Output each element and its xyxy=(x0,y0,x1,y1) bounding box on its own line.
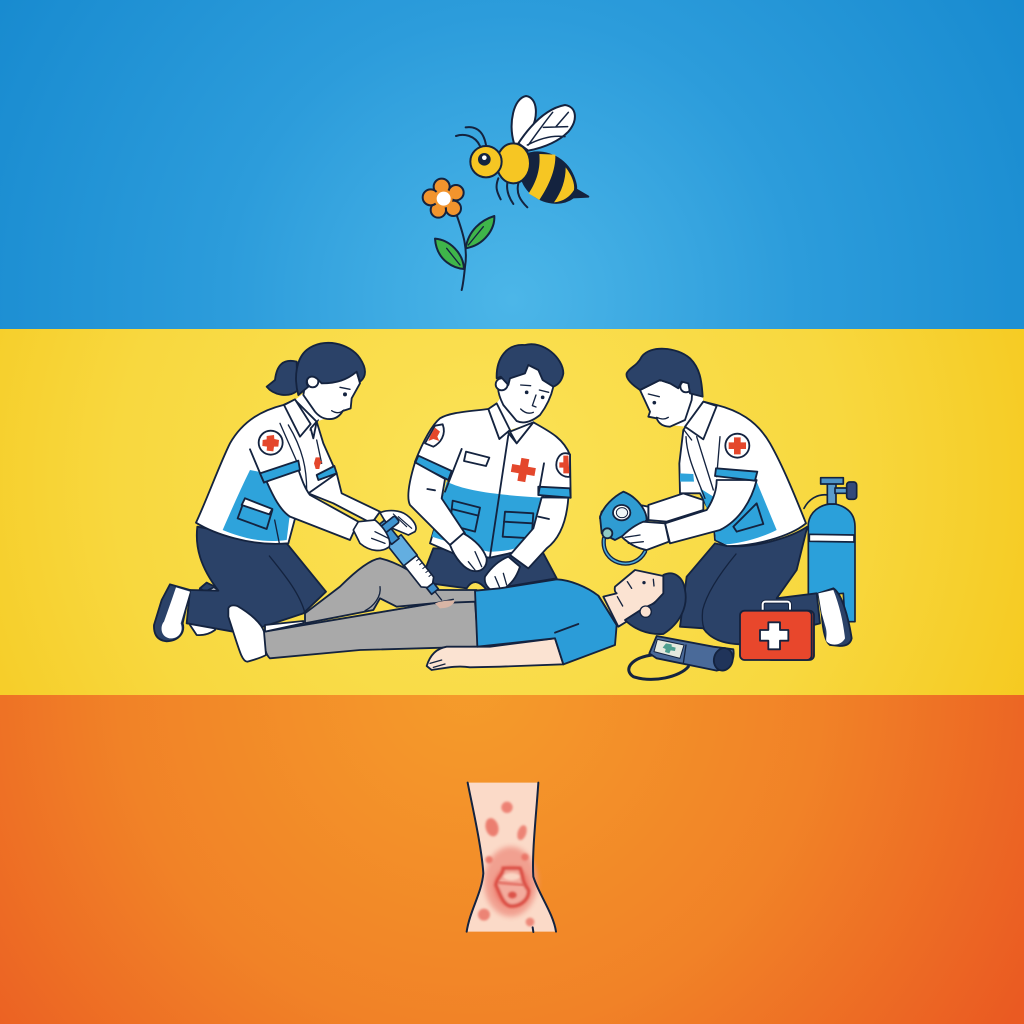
patch left xyxy=(425,424,444,447)
trousers xyxy=(425,548,557,590)
sleeve bands xyxy=(415,456,452,480)
forearm and hand xyxy=(427,638,563,670)
front shoe xyxy=(154,584,190,641)
shirt xyxy=(415,409,571,558)
shoulder patch xyxy=(725,434,749,458)
hair xyxy=(296,343,365,395)
ponytail xyxy=(267,361,297,395)
shoulder patch xyxy=(259,431,283,455)
arm outline xyxy=(467,783,556,932)
figure: central paramedic xyxy=(408,344,571,592)
hair xyxy=(625,573,686,634)
icon: blood pressure cuff xyxy=(629,636,735,679)
figure: paramedic holding mask xyxy=(600,349,852,646)
placket xyxy=(490,435,508,557)
trousers xyxy=(680,527,820,644)
swelling xyxy=(484,847,537,917)
near arm xyxy=(665,480,757,543)
collar xyxy=(284,399,317,438)
pocket xyxy=(733,503,763,532)
neck xyxy=(670,380,703,427)
icon: flower xyxy=(423,179,494,290)
icon: bee xyxy=(456,96,588,207)
back shoe xyxy=(190,583,223,635)
far arm xyxy=(308,473,380,523)
hand xyxy=(622,522,669,550)
spots xyxy=(501,802,513,813)
panel: yellow response band xyxy=(0,329,1024,695)
navy trousers xyxy=(187,527,326,632)
icon: auto-injector syringe xyxy=(353,511,454,610)
arms xyxy=(408,462,465,545)
red cross xyxy=(509,456,537,484)
figure: patient trousers and shoe xyxy=(228,558,478,662)
icon: first aid kit xyxy=(740,602,814,660)
blue t-shirt xyxy=(475,579,617,664)
neck and face xyxy=(603,570,667,627)
shoe xyxy=(818,588,852,646)
figure: paramedic giving injection xyxy=(154,343,380,641)
near arm xyxy=(267,465,358,540)
neck xyxy=(295,393,328,425)
face xyxy=(303,360,360,419)
far arm xyxy=(648,493,703,522)
neck xyxy=(497,398,533,430)
oxygen mask xyxy=(604,538,645,564)
small chest cross xyxy=(314,457,322,469)
hair xyxy=(497,344,563,387)
hair xyxy=(626,349,703,397)
patch right xyxy=(556,453,570,477)
figure: patient lying down xyxy=(427,570,686,670)
shirt xyxy=(679,402,806,546)
panel: orange reaction band xyxy=(0,695,1024,1024)
pocket xyxy=(238,498,272,529)
figure: oxygen tank xyxy=(804,478,857,622)
panel: blue sky band xyxy=(0,0,1024,329)
collar xyxy=(685,402,717,439)
central welt xyxy=(496,868,528,906)
face xyxy=(640,380,693,427)
name tag xyxy=(464,452,489,466)
hands xyxy=(450,533,487,571)
collar xyxy=(488,403,533,443)
icon: forearm with sting rash xyxy=(467,783,556,932)
face xyxy=(498,355,557,422)
shirt xyxy=(196,400,337,544)
pockets xyxy=(450,501,480,532)
